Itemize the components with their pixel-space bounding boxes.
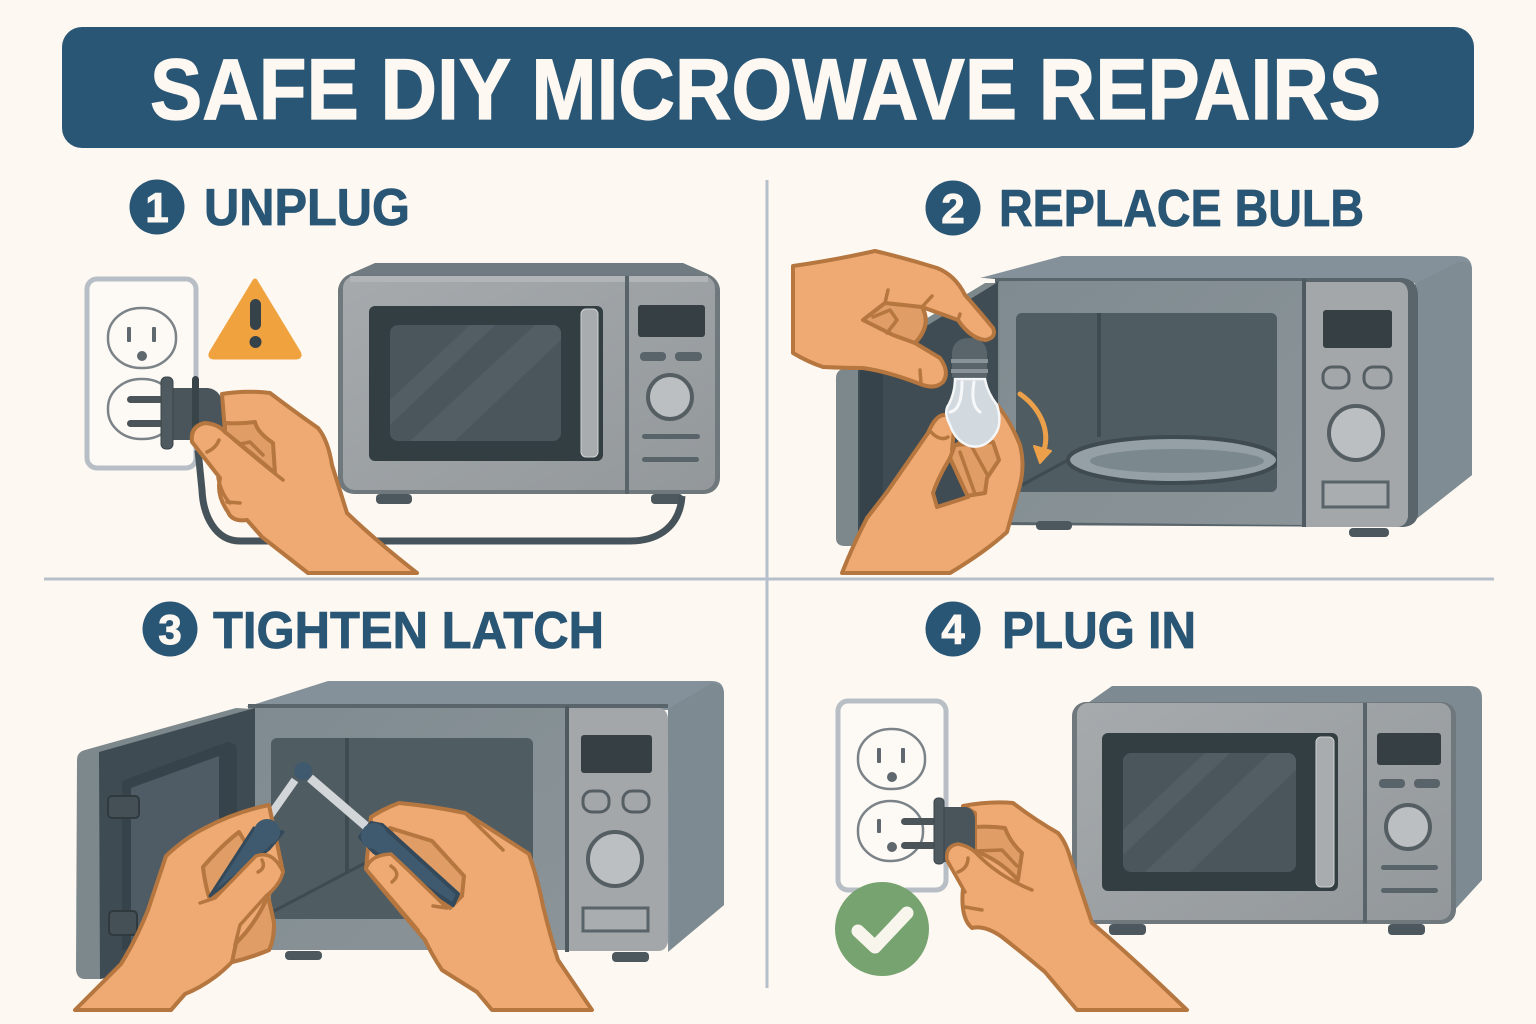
hand inserting plug: [947, 802, 1187, 1010]
icon: green check mark: [835, 882, 929, 976]
hand holding bulb from below: [842, 405, 1022, 573]
panel: step 4 plug in: [835, 602, 1482, 1010]
illustration: microwave with open door: [246, 681, 724, 962]
heading: step 4: [926, 602, 1196, 660]
illustration: microwave with open door: [980, 256, 1472, 537]
title banner: SAFE DIY MICROWAVE REPAIRS: [150, 42, 1381, 138]
power plug: [127, 376, 223, 449]
power plug: [901, 798, 975, 864]
screwdriver tips: [269, 762, 367, 827]
heading: step 1: UNPLUG: [204, 179, 410, 237]
heading: step 3: TIGHTEN LATCH: [213, 602, 604, 660]
turntable plate: [1068, 437, 1278, 483]
right hand with screwdriver: [360, 803, 592, 1010]
hand pulling plug: [192, 392, 417, 573]
heading: step 4: PLUG IN: [1002, 602, 1196, 660]
panel: step 1 unplug: [87, 179, 720, 573]
illustration: microwave, front view: [338, 263, 720, 504]
left hand with screwdriver: [75, 805, 283, 1010]
icon: warning triangle: [211, 281, 299, 357]
open microwave door: [836, 282, 1000, 546]
icon: wall outlet with two sockets: [838, 701, 946, 890]
light bulb: [946, 338, 999, 447]
illustration: microwave, front view: [1072, 686, 1482, 935]
icon: wall outlet with two sockets: [87, 279, 196, 468]
power cord: [198, 450, 682, 541]
heading: step 4: 4: [941, 606, 965, 653]
heading: step 2: 2: [941, 185, 965, 232]
heading: step 3: 3: [158, 606, 182, 653]
heading: step 2: REPLACE BULB: [999, 180, 1364, 238]
thumb over plug: [947, 844, 1032, 900]
panel: step 2 replace bulb: [793, 180, 1472, 573]
open microwave door: [76, 708, 255, 979]
panel: step 3 tighten latch: [75, 602, 724, 1010]
hand holding bulb from above: [793, 251, 994, 387]
heading: step 1: 1: [145, 184, 169, 231]
arrow: rotate direction: [1020, 394, 1051, 463]
